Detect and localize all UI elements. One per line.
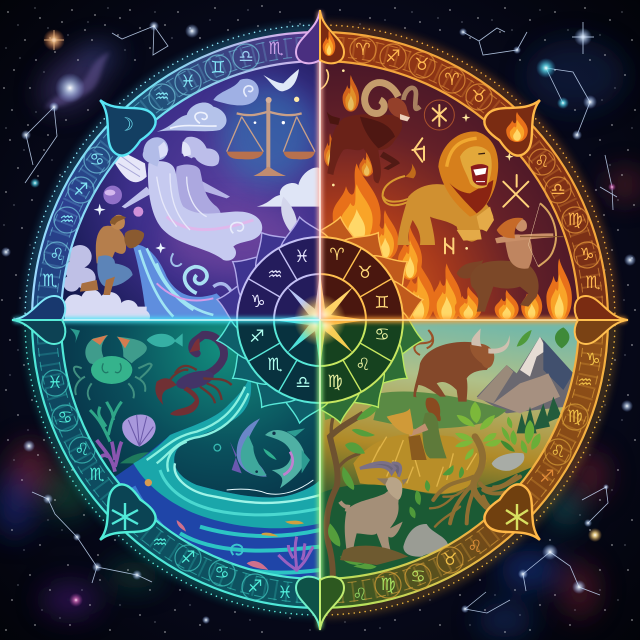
earth ground [321, 467, 532, 578]
ring ornaments [320, 320, 603, 603]
band: earth zodiac ring [320, 320, 608, 608]
icon: capricorn goat [340, 463, 408, 565]
forest [517, 397, 562, 433]
band: water zodiac ring [32, 320, 320, 608]
small fish [70, 328, 183, 347]
zodiac glyphs: ♋︎ [57, 408, 73, 428]
icon: feather [281, 197, 297, 232]
disc zodiac glyphs: ♐︎ [249, 327, 265, 347]
small sparks [332, 69, 514, 250]
zodiac glyphs: ♌︎ [74, 440, 90, 460]
zodiac glyphs: ♋︎ [410, 567, 426, 587]
right cloud [257, 167, 320, 207]
hill [373, 392, 507, 430]
zodiac glyphs: ♍︎ [380, 575, 396, 595]
glyph rings [350, 37, 600, 268]
zodiac glyphs: ♏︎ [585, 273, 601, 293]
center zodiac disc [237, 237, 403, 403]
zodiac glyphs [42, 39, 284, 291]
rocks right [492, 453, 524, 471]
diagonal ornament: air: ☽ [118, 114, 134, 136]
zodiac glyphs: ♉︎ [442, 550, 458, 570]
zodiac glyphs: ♒︎ [577, 373, 593, 393]
mountains [477, 337, 573, 413]
disc zodiac glyphs: ♈︎ [329, 245, 345, 265]
zodiac glyphs: ♏︎ [89, 465, 105, 485]
diagonal ornament: water [81, 480, 160, 559]
cardinal ornament: bottom [296, 577, 344, 630]
zodiac glyphs [355, 40, 601, 293]
zodiac glyphs: ♎︎ [550, 180, 566, 200]
panel: air quadrant [63, 62, 320, 320]
zodiac glyphs: ♌︎ [467, 537, 483, 557]
zodiac glyphs: ♑︎ [579, 245, 595, 265]
coral and shell [89, 400, 156, 472]
band: air zodiac ring [32, 32, 320, 320]
ring ornaments [37, 37, 320, 320]
disc zodiac glyphs: ♊︎ [374, 293, 390, 313]
cardinal ornament: right [575, 296, 628, 344]
zodiac glyphs: ♎︎ [238, 47, 254, 67]
zodiac glyphs: ♑︎ [585, 350, 601, 370]
center lotus petals [212, 212, 428, 428]
disc zodiac glyphs: ♏︎ [267, 355, 283, 375]
coral bottom right and sea life [145, 479, 313, 572]
runes [320, 70, 528, 253]
floating leaves [517, 327, 569, 348]
glyph rings [42, 370, 268, 600]
zodiac glyphs: ♓︎ [277, 583, 293, 603]
glyph rings [44, 44, 259, 268]
stream of water from jar [133, 245, 237, 320]
air swirl and cloud [157, 79, 259, 132]
wings and gemini twins [109, 137, 262, 261]
zodiac glyphs: ♐︎ [73, 180, 89, 200]
glyph rings [375, 404, 588, 598]
icon: virgo harvest maiden [387, 398, 447, 460]
plants right [500, 417, 541, 453]
icon: cancer crab [74, 335, 152, 400]
small grass plants [409, 465, 464, 518]
ring ornaments [37, 320, 320, 603]
zodiac glyphs: ♉︎ [414, 55, 430, 75]
disc zodiac glyphs: ♑︎ [250, 292, 266, 312]
zodiac glyphs: ♈︎ [355, 40, 371, 60]
disc zodiac glyphs: ♍︎ [327, 372, 343, 392]
cardinal ornament: left [12, 296, 65, 344]
panel: fire quadrant [320, 62, 577, 320]
zodiac glyphs: ♋︎ [214, 563, 230, 583]
icon: libra scales [227, 97, 315, 176]
diagonal ornament: earth [480, 480, 559, 559]
icon: sagittarius centaur [457, 203, 563, 312]
zodiac glyphs: ♌︎ [550, 442, 566, 462]
flames [322, 75, 572, 323]
compass star [272, 272, 368, 368]
zodiac glyphs: ♒︎ [152, 533, 168, 553]
zodiac glyphs: ♏︎ [268, 39, 284, 59]
disc zodiac glyphs: ♎︎ [295, 373, 311, 393]
diagonal ornament: fire [480, 81, 559, 160]
icon: aries ram [327, 83, 420, 183]
zodiac glyphs [47, 373, 293, 603]
zodiac glyphs: ♒︎ [154, 87, 170, 107]
icon: leo lion [383, 132, 498, 245]
icon: scorpio scorpion [155, 335, 232, 416]
galaxy [45, 52, 110, 108]
zodiac glyphs: ♐︎ [385, 47, 401, 67]
zodiac glyphs: ♓︎ [47, 373, 63, 393]
disc zodiac glyphs [249, 245, 390, 393]
ring ornaments [320, 37, 603, 320]
zodiac glyphs: ♊︎ [210, 58, 226, 78]
disc zodiac glyphs: ♉︎ [357, 263, 373, 283]
zodiac glyphs: ♍︎ [567, 210, 583, 230]
diagonal ornament: air [81, 81, 160, 160]
zodiac glyphs: ♌︎ [49, 245, 65, 265]
icon: taurus bull [413, 328, 510, 402]
zodiac glyphs: ♋︎ [89, 150, 105, 170]
disc zodiac glyphs: ♒︎ [267, 265, 283, 285]
cardinal ornament: top [296, 10, 344, 63]
aquarius water bearer with clouds [63, 215, 150, 323]
small planets [94, 97, 299, 253]
disc zodiac glyphs: ♋︎ [374, 325, 390, 345]
zodiac glyphs: ♐︎ [180, 548, 196, 568]
zodiac glyphs: ♍︎ [567, 407, 583, 427]
zodiac glyphs: ♒︎ [59, 210, 75, 230]
left gnarled tree [324, 404, 380, 576]
disc dividers [248, 248, 392, 392]
zodiac glyphs [352, 350, 601, 605]
zodiac glyphs: ♈︎ [444, 70, 460, 90]
panel: water quadrant [63, 320, 320, 578]
zodiac glyphs: ♌︎ [352, 585, 368, 605]
zodiac glyphs: ♏︎ [42, 271, 58, 291]
zodiac glyphs: ♐︎ [247, 577, 263, 597]
zodiac glyphs: ♉︎ [471, 87, 487, 107]
panel: earth quadrant [320, 320, 577, 578]
zodiac glyphs: ♓︎ [180, 72, 196, 92]
tree with roots [430, 402, 525, 527]
flowing waves [115, 381, 320, 578]
icon: pisces fish [214, 418, 310, 488]
icon: white dove [263, 69, 299, 91]
rocks [403, 524, 448, 557]
disc zodiac glyphs: ♓︎ [294, 247, 310, 267]
wheat field [353, 434, 487, 494]
zodiac glyphs: ♌︎ [534, 152, 550, 172]
band: fire zodiac ring [320, 32, 608, 320]
disc zodiac glyphs: ♌︎ [355, 355, 371, 375]
zodiac glyphs: ♐︎ [539, 467, 555, 487]
